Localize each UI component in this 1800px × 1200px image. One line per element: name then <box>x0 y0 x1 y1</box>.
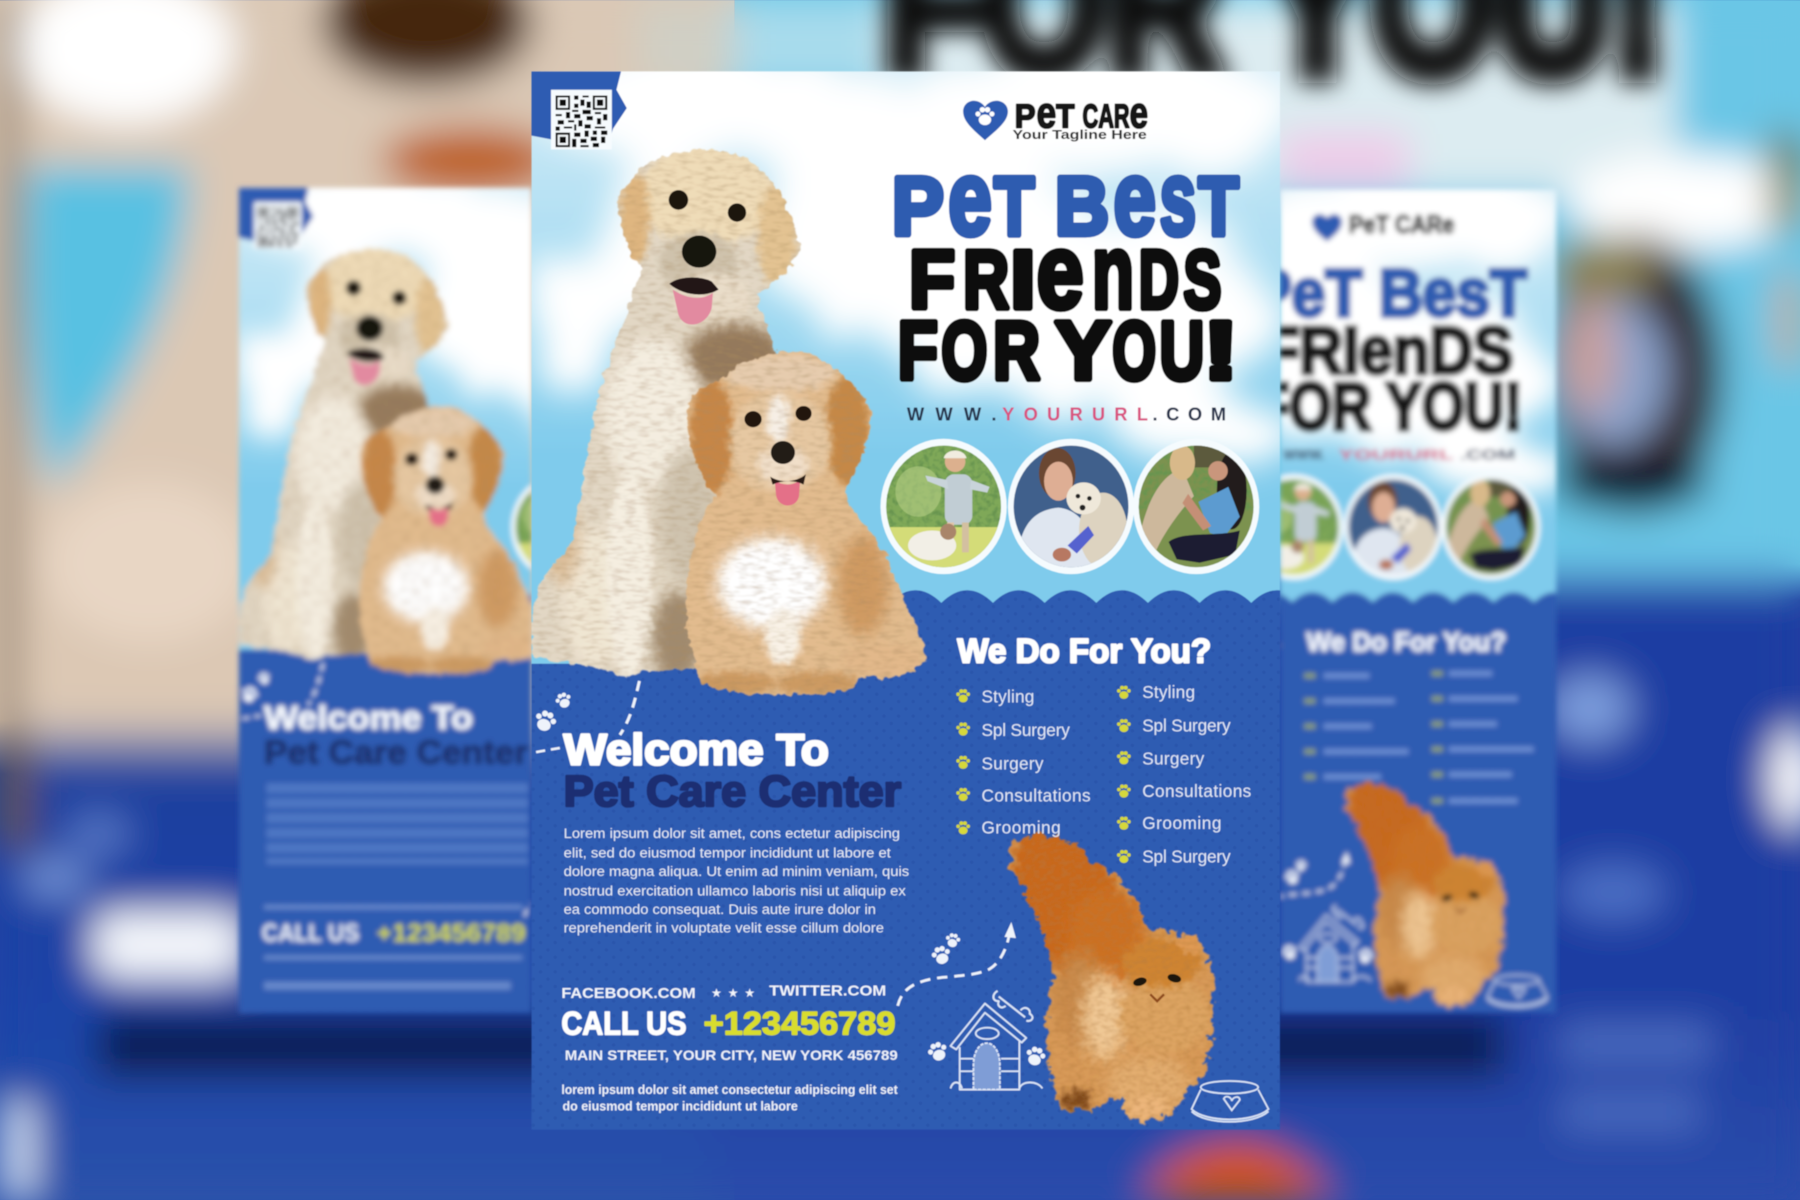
services list right: Consultations <box>1142 781 1251 801</box>
dashed trail with paws, welcome section <box>532 681 639 752</box>
left flyer heading: Pet Care Center <box>264 735 528 772</box>
welcome paragraph <box>564 825 909 935</box>
photo circle: vet with dog <box>1008 439 1136 574</box>
footer note: lorem ipsum dolor sit amet consectetur adipiscing elit set <box>561 1083 898 1097</box>
services list left: Surgery <box>982 753 1044 773</box>
headline: O <box>941 304 987 397</box>
logo name and tagline: P <box>1015 99 1035 136</box>
dashed arrow to cat <box>898 922 1016 1006</box>
blurred background: paws and icons left <box>0 813 243 1200</box>
QR code tag <box>532 71 627 149</box>
headline: e <box>1114 139 1156 257</box>
blurred background: giant cat tail <box>1142 1141 1332 1200</box>
pet bowl line icon <box>1192 1081 1268 1122</box>
blurred background: giant dog fur <box>321 0 884 195</box>
services list right: Spl Surgery <box>1142 846 1231 866</box>
right flyer url: YOURURL <box>1339 446 1453 463</box>
left flyer call to action <box>262 920 526 948</box>
right flyer logo <box>1312 211 1454 241</box>
right flyer services list <box>1304 671 1534 804</box>
right flyer headline: FOR YOU! <box>1256 371 1522 445</box>
services list left: Spl Surgery <box>982 720 1070 740</box>
logo name and tagline: T <box>1056 99 1074 136</box>
welcome paragraph: ea commodo consequat. Duis aute irure dolor in <box>564 901 876 917</box>
headline: e <box>1037 213 1084 331</box>
flyer artwork <box>521 40 1309 1130</box>
golden retriever <box>522 138 809 689</box>
photo circle: woman hugging dog <box>1133 439 1263 574</box>
paws beside dog house <box>926 1040 1047 1067</box>
social links: TWITTER.COM <box>769 982 886 999</box>
havanese puppy <box>677 345 936 700</box>
sky with clouds <box>521 40 1309 691</box>
persian cat <box>990 801 1223 1127</box>
right flyer services heading: We Do For You? <box>1306 627 1506 657</box>
headline: R <box>963 233 1009 326</box>
cat face <box>1132 973 1182 1001</box>
headline: ! <box>1203 304 1239 397</box>
left flyer call to action: CALL US <box>262 920 359 948</box>
headline: U <box>1159 304 1204 397</box>
blurred background: shadow band under flyers <box>98 1015 1504 1077</box>
welcome paragraph: Lorem ipsum dolor sit amet, cons ectetur adipiscing <box>564 825 900 841</box>
headline: n <box>1092 213 1134 331</box>
logo name and tagline: e <box>1037 90 1056 138</box>
headline: T <box>994 159 1034 252</box>
website url: .COM <box>1153 403 1226 424</box>
right flyer url: .COM <box>1460 446 1515 463</box>
logo name and tagline <box>1013 90 1148 142</box>
services list left: Grooming <box>982 818 1061 838</box>
address: MAIN STREET, YOUR CITY, NEW YORK 456789 <box>565 1048 898 1063</box>
blurred background: sky and clouds left <box>0 0 253 850</box>
blurred background: far right photo circle <box>1770 132 1800 365</box>
blurred right flyer <box>1280 186 1560 1016</box>
right flyer url <box>1283 446 1515 463</box>
services list right: Grooming <box>1142 813 1221 833</box>
headline: B <box>1055 159 1109 252</box>
left flyer small lines <box>264 905 522 990</box>
footer note: do eiusmod tempor incididunt ut labore <box>562 1099 798 1113</box>
social links <box>561 982 886 1002</box>
headline: I <box>1010 233 1035 326</box>
icon: heart with paw <box>963 101 1008 140</box>
welcome paragraph: nostrud exercitation ullamco laboris nisi ut aliquip ex <box>564 883 906 899</box>
right flyer headline: FRIenDS <box>1263 314 1513 388</box>
right flyer headline: PeT BesT <box>1251 257 1527 331</box>
left flyer heading: Welcome To <box>264 700 473 737</box>
welcome paragraph: elit, sed do eiusmod tempor incididunt ut labore et <box>564 845 891 861</box>
welcome heading: Welcome To <box>564 727 829 775</box>
headline: e <box>948 139 992 257</box>
services list right: Surgery <box>1142 749 1205 769</box>
main flyer <box>521 40 1309 1130</box>
services list left: Consultations <box>982 785 1091 805</box>
dog house line icon <box>951 991 1042 1090</box>
headline: F <box>909 233 955 326</box>
welcome paragraph: reprehenderit in voluptate velit esse cillum dolore <box>564 919 884 935</box>
right flyer headline <box>1279 264 1532 436</box>
paw prints near arrow <box>930 932 961 966</box>
headline: P <box>892 159 944 252</box>
footer note <box>561 1083 898 1113</box>
welcome paragraph: dolore magna aliqua. Ut enim ad minim veniam, quis <box>564 863 909 879</box>
call to action phone: CALL US <box>561 1006 686 1042</box>
services list left <box>956 687 1091 838</box>
social links: FACEBOOK.COM <box>561 985 696 1002</box>
left flyer paragraph <box>266 783 528 865</box>
website url <box>907 403 1226 424</box>
services list left: Styling <box>982 687 1034 707</box>
headline: s <box>1159 139 1196 257</box>
services list right: Styling <box>1142 682 1195 702</box>
website url: WWW. <box>907 403 996 424</box>
left flyer call to action: +123456789 <box>377 920 526 948</box>
welcome heading <box>564 727 901 816</box>
left flyer heading <box>264 700 528 772</box>
blurred background: giant photo circle <box>1549 234 1723 514</box>
blurred background: light band and url <box>884 0 1800 249</box>
services list right <box>1117 682 1251 866</box>
logo name and tagline: e <box>1130 90 1148 138</box>
logo <box>963 90 1148 142</box>
headline: Y <box>1055 304 1111 397</box>
right flyer url: WWW. <box>1283 446 1325 463</box>
call to action phone: +123456789 <box>704 1006 895 1042</box>
headline: D <box>1139 233 1179 326</box>
headline: S <box>1184 233 1221 326</box>
welcome heading: Pet Care Center <box>564 768 901 816</box>
blue lower panel with wavy edge <box>532 590 1303 1130</box>
blurred left flyer <box>234 184 532 1016</box>
headline: F <box>898 304 938 397</box>
heading: we do for you: We Do For You? <box>957 633 1211 671</box>
headline <box>892 139 1239 397</box>
call to action phone <box>561 1006 895 1042</box>
blurred background: paws and icons right <box>1549 674 1800 1129</box>
headline: T <box>1198 159 1239 252</box>
headline: R <box>993 304 1040 397</box>
website url: YOURURL <box>1002 403 1148 424</box>
logo name and tagline: CAR <box>1083 99 1130 136</box>
social links: ★ ★ ★ <box>712 989 754 1000</box>
right flyer logo: PeT CARe <box>1349 211 1454 239</box>
photo circle: boy with dog <box>880 439 1010 574</box>
logo name and tagline: Your Tagline Here <box>1013 128 1147 142</box>
headline: O <box>1112 304 1156 397</box>
services list right: Spl Surgery <box>1142 715 1231 735</box>
